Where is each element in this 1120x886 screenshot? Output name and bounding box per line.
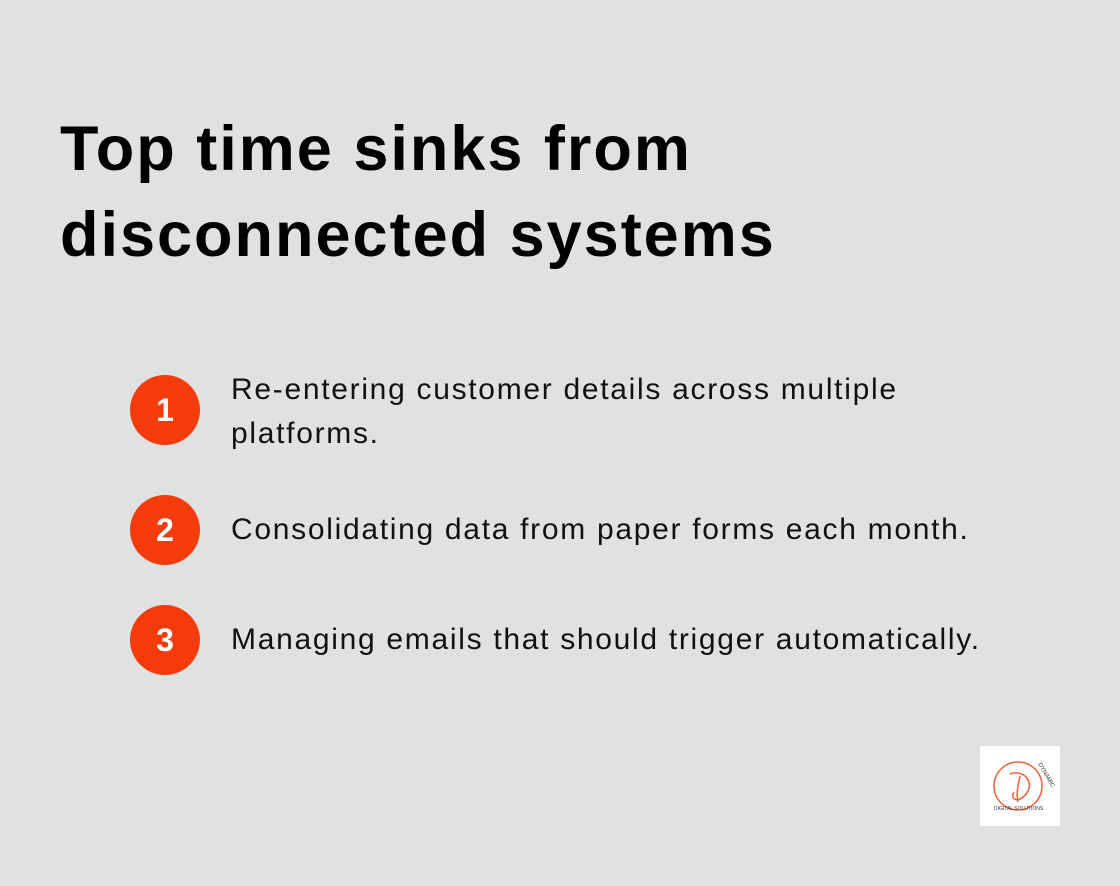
text 1: platforms. (231, 417, 380, 450)
text 2: Consolidating data from paper forms each month. (231, 513, 970, 546)
badge 2 (130, 495, 200, 565)
badge 2: 2 (156, 512, 174, 548)
text 3: Managing emails that should trigger automatically. (231, 623, 981, 656)
logo: DYNAMIC (1036, 762, 1056, 790)
badge 3 (130, 605, 200, 675)
badge 1: 1 (156, 392, 174, 428)
logo (980, 746, 1060, 826)
item 1 (130, 373, 898, 450)
text 1 (231, 373, 898, 450)
title (60, 114, 776, 270)
title: disconnected systems (60, 200, 776, 270)
badge 1 (130, 375, 200, 445)
item 2 (130, 495, 970, 565)
logo: DIGITAL SOLUTIONS (994, 806, 1044, 812)
badge 3: 3 (156, 622, 174, 658)
text 1: Re-entering customer details across multiple (231, 373, 898, 406)
item 3 (130, 605, 981, 675)
title: Top time sinks from (60, 114, 692, 184)
